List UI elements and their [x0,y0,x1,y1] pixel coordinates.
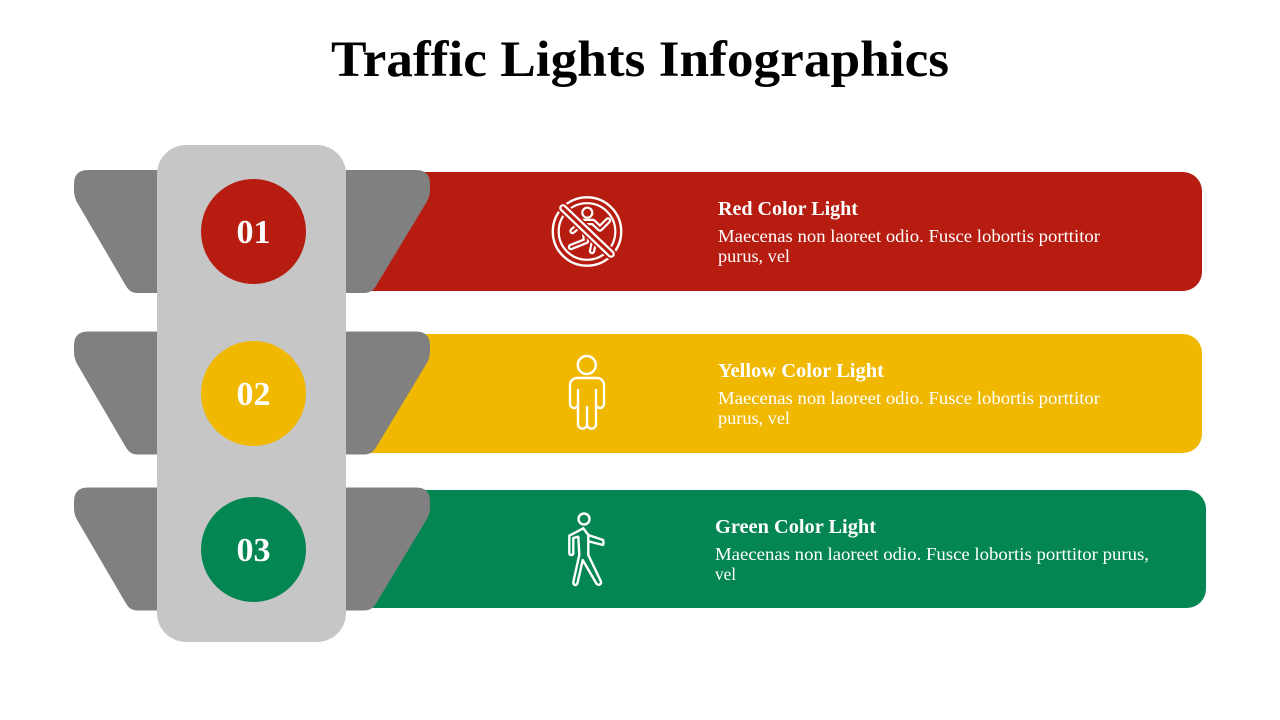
yellow body text: purus, vel [718,408,790,428]
green heading: Green Color Light [715,516,876,538]
icon: no pedestrians [553,197,621,266]
panel: yellow light [350,334,1202,453]
icon: standing person [570,356,604,429]
pole housing [157,145,346,642]
light 02 [201,341,306,446]
yellow heading: Yellow Color Light [718,360,884,382]
light 01 [201,179,306,284]
red bar [350,172,1202,291]
green bar [350,490,1206,608]
middle visor [74,332,430,454]
traffic light [74,145,430,642]
red heading: Red Color Light [718,198,858,220]
light 03: 03 [236,532,270,569]
top visor [74,170,430,293]
yellow bar [350,334,1202,453]
light 01: 01 [236,214,270,251]
light 03 [201,497,306,602]
light 02: 02 [236,376,270,413]
green body text [715,544,1149,584]
green body text: vel [715,564,736,584]
yellow body text: Maecenas non laoreet odio. Fusce lobortis porttitor [718,388,1100,408]
red body text: purus, vel [718,246,790,266]
yellow body text [718,388,1100,428]
title: Traffic Lights Infographics [331,32,949,88]
icon: walking person [569,514,604,585]
green body text: Maecenas non laoreet odio. Fusce lobortis porttitor purus, [715,544,1149,564]
panel: green light [350,490,1206,608]
red body text: Maecenas non laoreet odio. Fusce lobortis porttitor [718,226,1100,246]
panel: red light [350,172,1202,291]
red body text [718,226,1100,266]
bottom visor [74,488,430,610]
